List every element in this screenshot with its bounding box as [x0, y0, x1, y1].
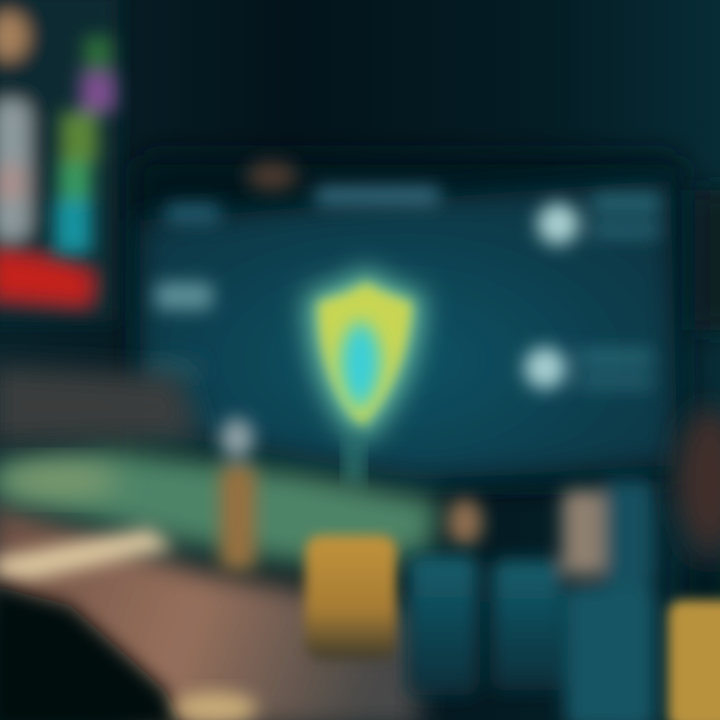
table: felt pale patch	[0, 462, 120, 498]
table: bottom left shadow	[0, 585, 185, 720]
table: green felt	[0, 450, 440, 565]
screen: left labels	[150, 203, 220, 380]
screen: top right node	[537, 195, 660, 245]
panel: main dashboard screen	[135, 155, 685, 485]
screen: lower right node	[524, 347, 653, 389]
table: desk surface	[0, 365, 440, 720]
coin stack: tall gold left	[220, 418, 256, 570]
icon: shield	[306, 268, 424, 485]
table: mid band dark	[0, 365, 200, 445]
monitor figure accent	[0, 165, 25, 200]
table: bottom glare	[173, 692, 257, 720]
shield glow stem	[346, 435, 362, 485]
table: bright glare	[0, 528, 175, 580]
figure: right edge silhouette	[676, 190, 720, 610]
coin stack: gold centre	[305, 535, 397, 660]
screen: title label	[246, 161, 440, 206]
panel: left monitor	[0, 0, 118, 320]
coin stack: gold right corner	[668, 600, 720, 720]
monitor figure body	[0, 100, 30, 240]
monitor figure head	[0, 12, 28, 60]
coin stack: small tan marker	[447, 498, 483, 546]
red banner	[0, 250, 92, 304]
coin stack: teal row	[408, 480, 655, 720]
chart: colour column on left monitor	[54, 36, 116, 254]
